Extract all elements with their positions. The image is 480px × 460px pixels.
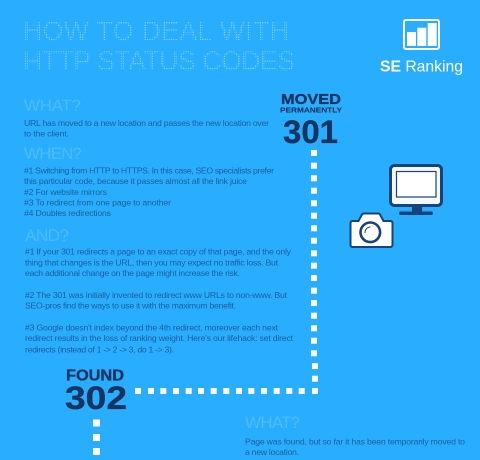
section: and 301: #2 The 301 was initially invented to redirect www URLs to non-www. But <box>25 290 288 300</box>
section: what 301 <box>24 96 269 138</box>
badge: found 302 <box>65 368 127 416</box>
section: and 301: SEO-pros find the ways to use it with the maximum benefit. <box>25 300 236 310</box>
section: and 301: #1 If your 301 redirects a page to an exact copy of that page, and the only <box>25 246 292 256</box>
section: when 301: #2 For website mirrors <box>24 187 108 197</box>
connector: 301 to 302 dotted line <box>135 150 318 394</box>
logo: SE Ranking <box>380 20 463 76</box>
section: what 302 <box>245 413 465 457</box>
section: when 301: this particular code, because it passes almost all the link juice <box>24 176 247 186</box>
section: what 302: WHAT? <box>245 413 300 432</box>
badge: found 302: 302 <box>65 380 127 416</box>
badge: moved permanently 301 <box>280 91 342 150</box>
section: and 301: #3 Google doesn't index beyond the 4th redirect, moreover each next <box>25 322 279 332</box>
section: and 301 <box>25 226 294 354</box>
section: when 301 <box>24 144 274 218</box>
section: and 301: redirect results in the loss of ranking weight. Here's our lifehack: set direct <box>25 333 294 343</box>
section: what 301: to the client. <box>24 128 69 138</box>
section: and 301: AND? <box>25 226 69 245</box>
section: when 301: #1 Switching from HTTP to HTTPS. In this case, SEO specialists prefer <box>24 166 274 176</box>
badge: found 302: FOUND <box>66 368 124 384</box>
badge: moved permanently 301: 301 <box>283 114 338 150</box>
title: HTTP STATUS CODES <box>23 46 295 76</box>
section: when 301: WHEN? <box>24 144 82 163</box>
badge: moved permanently 301: MOVED <box>281 91 341 108</box>
section: when 301: #3 To redirect from one page to another <box>24 198 171 208</box>
section: and 301: redirects (instead of 1 -> 2 -> 3, do 1 -> 3). <box>25 344 174 354</box>
icon: monitor <box>390 166 442 215</box>
icon: camera <box>350 214 392 247</box>
section: what 301: URL has moved to a new location and passes the new location over <box>24 118 269 128</box>
title <box>23 16 295 76</box>
section: when 301: #4 Doubles redirections <box>24 208 112 218</box>
section: what 301: WHAT? <box>24 96 81 115</box>
logo: SE Ranking: SE Ranking <box>380 58 463 76</box>
badge: moved permanently 301: PERMANENTLY <box>280 106 342 114</box>
title: HOW TO DEAL WITH <box>23 16 289 46</box>
connector: 302 downward dotted line <box>93 420 100 455</box>
section: and 301: thing that changes is the URL, then you may expect no traffic loss. But <box>25 258 279 268</box>
section: what 302: a new location. <box>245 447 299 457</box>
section: what 302: Page was found, but so far it has been temporarily moved to <box>245 436 465 446</box>
section: and 301: each additional change on the page might increase the risk. <box>25 268 240 278</box>
